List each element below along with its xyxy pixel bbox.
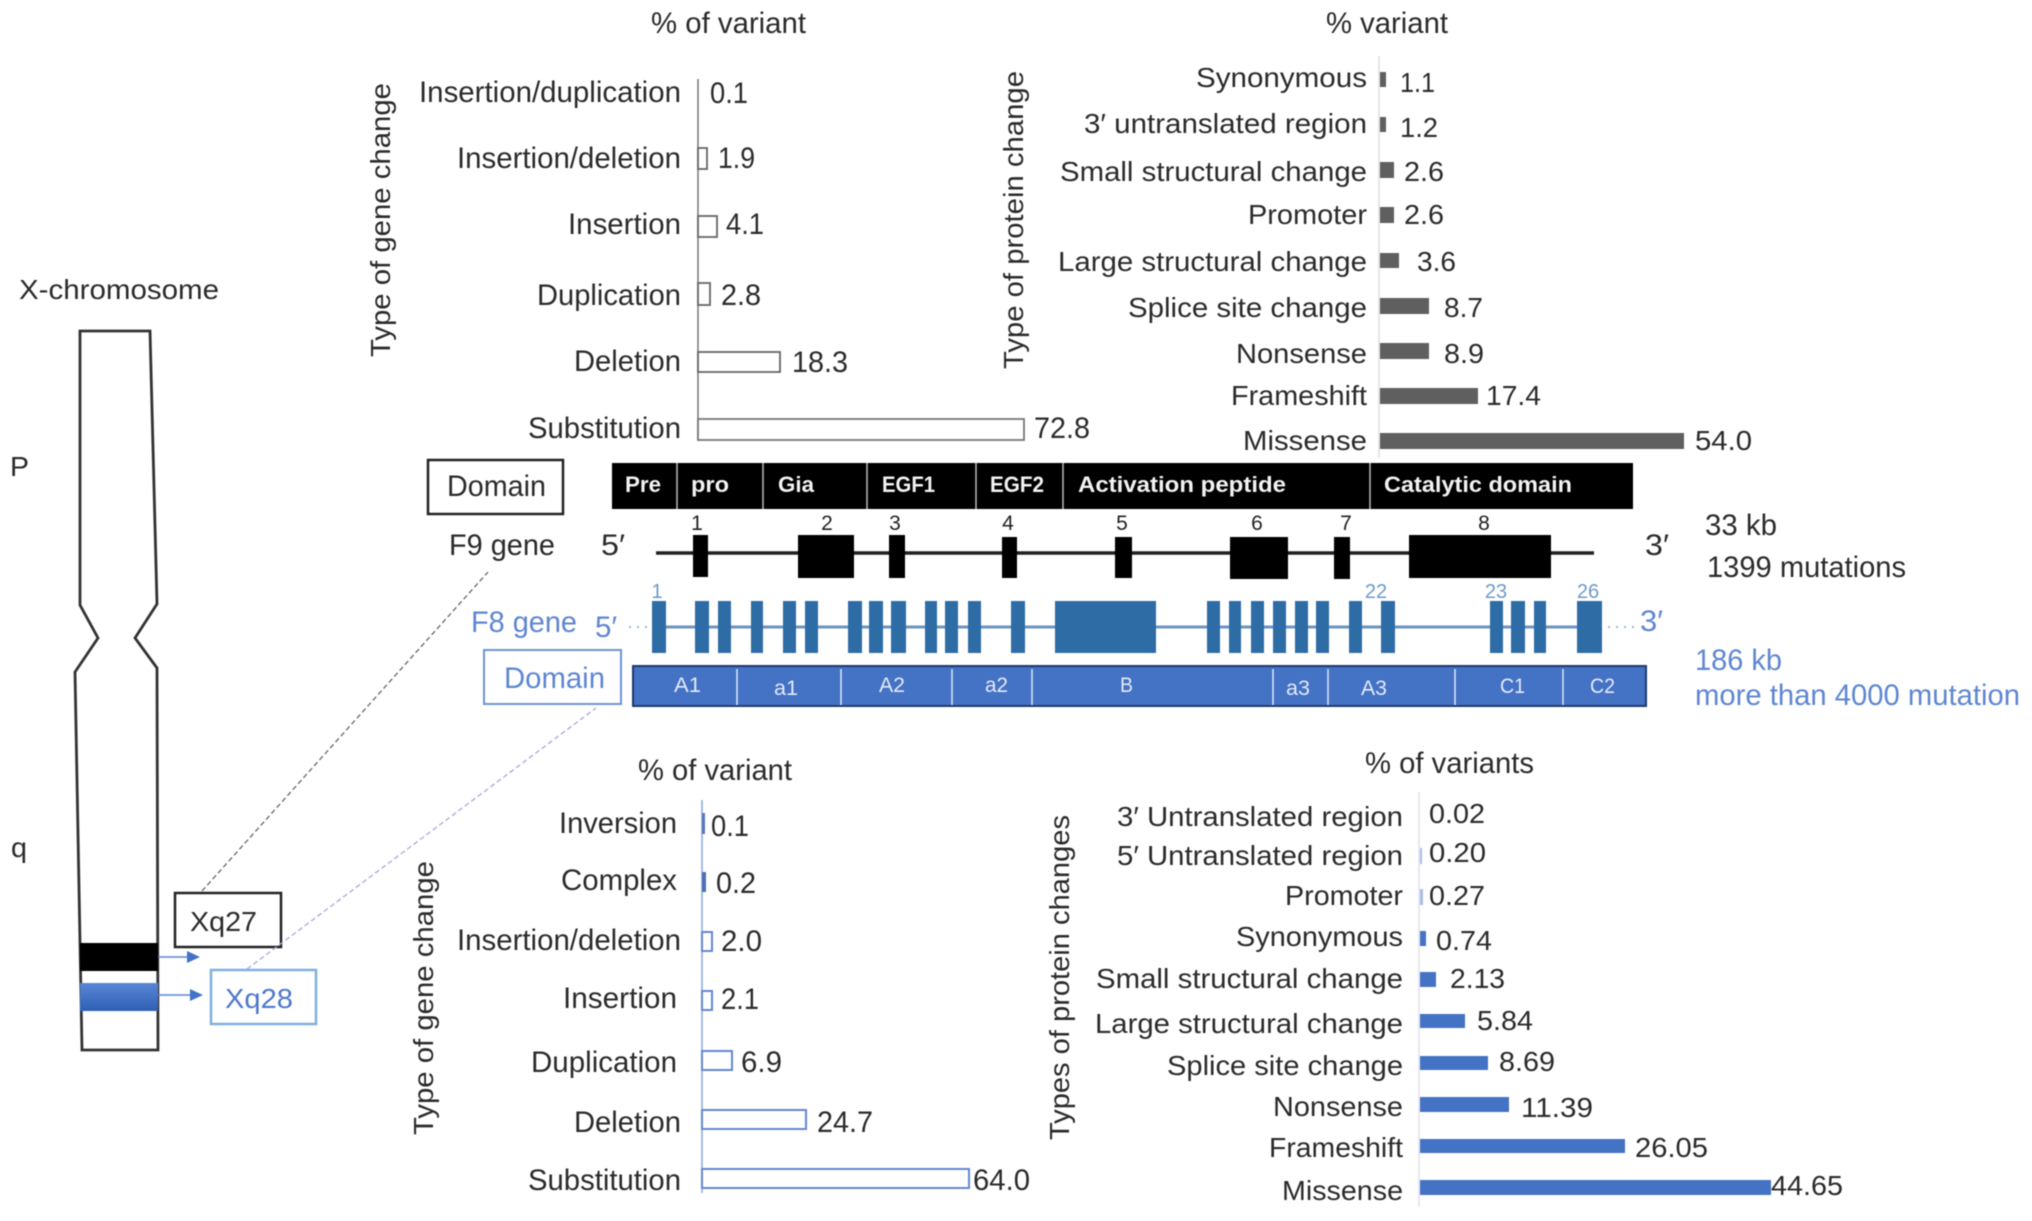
row: Splice site change: Splice site change (1167, 1050, 1403, 1081)
row: Missense (1282, 1170, 1843, 1206)
row: Duplication: Duplication (537, 279, 681, 312)
row: Nonsense: 11.39 (1521, 1092, 1593, 1123)
row: 5' Untranslated region: 0.20 (1429, 837, 1486, 868)
F9 domain bar: Gia (778, 472, 815, 497)
row: Inversion: Inversion (559, 807, 677, 840)
label: 3 prime end: 3′ (1640, 605, 1663, 638)
row: Synonymous: 1.1 (1400, 67, 1435, 98)
axis (1418, 792, 1420, 1207)
row: Synonymous: 0.74 (1436, 925, 1492, 956)
row: Insertion/deletion: 2.0 (721, 925, 762, 958)
F9 gene (449, 512, 1669, 579)
row: Frameshift: 26.05 (1635, 1132, 1708, 1163)
F9 domain bar: pro (691, 472, 729, 497)
row: Insertion/deletion: 1.9 (718, 142, 755, 175)
row: Splice site change (1128, 292, 1483, 323)
band: Xq28 (80, 983, 158, 1011)
row: Large structural change: 5.84 (1477, 1005, 1533, 1036)
row: Promoter: Promoter (1285, 880, 1403, 911)
label: P arm: P (10, 451, 29, 482)
row: Small structural change: 2.6 (1404, 156, 1444, 187)
row: Deletion: Deletion (574, 345, 681, 378)
row: 3' Untranslated region: 0.02 (1429, 798, 1485, 829)
axis (697, 79, 699, 441)
label box: Xq28 (211, 970, 316, 1024)
row: Inversion (559, 807, 749, 843)
row: Nonsense: 8.9 (1444, 338, 1484, 369)
row: Insertion: 2.1 (721, 983, 759, 1016)
row: Frameshift: Frameshift (1269, 1132, 1403, 1163)
row: Substitution: 64.0 (973, 1164, 1030, 1197)
exon numbers: 4 (1002, 512, 1014, 535)
axis title: Type of gene change (408, 861, 439, 1135)
chart: F9 type of gene change (365, 7, 1090, 445)
row: Insertion (568, 208, 764, 241)
label: 5 prime end: 5′ (601, 529, 625, 562)
F8 domain bar: a3 (1286, 677, 1310, 700)
row: Nonsense (1273, 1091, 1593, 1123)
F9 domain bar (612, 463, 1633, 509)
row: Promoter (1248, 199, 1444, 230)
row: 3' untranslated region: 3′ untranslated region (1084, 108, 1367, 139)
row: Inversion: 0.1 (711, 810, 749, 843)
exon numbers: 26 (1577, 581, 1599, 603)
exons (652, 601, 1602, 653)
label box: F9 Domain (428, 460, 563, 514)
connector: Xq27 to F9 gene (202, 572, 488, 891)
chart title: % of variants (1365, 747, 1534, 780)
row: Synonymous: Synonymous (1196, 62, 1367, 93)
label box: F8 Domain: Domain (504, 662, 605, 695)
exons (693, 535, 1551, 579)
F8 size and mutation count (1695, 644, 2020, 712)
axis title: Type of protein change (998, 71, 1029, 369)
label box: Xq27: Xq27 (190, 906, 257, 937)
row: Insertion: Insertion (563, 982, 677, 1015)
label: 5 prime end: 5′ (595, 611, 617, 644)
row: Substitution (528, 1164, 1030, 1197)
F9 domain bar: EGF2 (990, 472, 1044, 497)
exon numbers: 2 (821, 512, 833, 535)
exon numbers (651, 581, 1599, 603)
axis (1378, 56, 1380, 458)
row: Duplication (537, 279, 761, 312)
chart: F8 types of protein changes (1044, 747, 1843, 1207)
row: Small structural change: Small structural change (1096, 963, 1403, 994)
row: Large structural change: Large structural change (1095, 1008, 1403, 1039)
row: 3' Untranslated region (1117, 798, 1485, 832)
row: Large structural change (1095, 1005, 1533, 1039)
exon numbers: 8 (1478, 512, 1490, 535)
F8 domain bar (633, 666, 1646, 706)
row: Missense: 54.0 (1695, 425, 1752, 456)
row: Missense: Missense (1282, 1175, 1403, 1206)
panel: X-chromosome (10, 274, 316, 1050)
row: 3' Untranslated region: 3′ Untranslated region (1117, 801, 1403, 832)
row: Duplication: 6.9 (741, 1046, 782, 1079)
label: F9 gene: F9 gene (449, 529, 555, 562)
row: Deletion: 18.3 (792, 346, 848, 379)
row: Insertion/deletion: Insertion/deletion (457, 142, 681, 175)
row: Nonsense (1236, 338, 1484, 369)
exon numbers: 5 (1116, 512, 1128, 535)
F8 gene (471, 581, 1663, 653)
F9 size and mutation count: 1399 mutations (1707, 551, 1906, 584)
F9 domain bar: Catalytic domain (1384, 472, 1572, 497)
gene line (656, 551, 1594, 555)
row: 5' Untranslated region: 5′ Untranslated region (1117, 840, 1403, 871)
row: Large structural change: 3.6 (1417, 246, 1456, 277)
row: 3' untranslated region: 1.2 (1400, 112, 1438, 143)
row: Duplication: 2.8 (721, 279, 761, 312)
row: Substitution (528, 412, 1090, 445)
label: F8 gene: F8 gene (471, 606, 577, 639)
F9 size and mutation count (1705, 509, 1906, 584)
label: 3 prime end: 3′ (1645, 529, 1669, 562)
label box: F9 Domain: Domain (447, 470, 546, 503)
row: Insertion/deletion: Insertion/deletion (457, 924, 681, 957)
row: Splice site change: 8.69 (1499, 1046, 1555, 1077)
exon numbers: 3 (889, 512, 901, 535)
row: Frameshift (1231, 380, 1541, 411)
chart title: % of variant (651, 7, 807, 40)
row: Splice site change: 8.7 (1444, 292, 1483, 323)
exon numbers: 22 (1365, 581, 1387, 603)
row: Insertion/duplication: Insertion/duplication (419, 76, 681, 109)
row: Synonymous: Synonymous (1236, 921, 1403, 952)
F8 domain bar: B (1120, 674, 1133, 697)
row: Promoter: 2.6 (1404, 199, 1444, 230)
row: Complex: 0.2 (716, 867, 756, 900)
row: Missense: Missense (1243, 425, 1367, 456)
row: Synonymous (1236, 921, 1492, 956)
exon numbers: 1 (651, 581, 663, 603)
exon numbers: 23 (1485, 581, 1507, 603)
axis title: Types of protein changes (1044, 815, 1075, 1140)
arrow: Xq28 band to label (158, 989, 203, 1001)
exon numbers: 1 (691, 512, 703, 535)
label box: Xq28: Xq28 (225, 983, 293, 1014)
row: Duplication: Duplication (531, 1046, 677, 1079)
row: Small structural change: 2.13 (1450, 963, 1505, 994)
row: Frameshift: 17.4 (1486, 380, 1541, 411)
row: Splice site change (1167, 1046, 1555, 1081)
row: Deletion (574, 1106, 873, 1139)
F8 domain bar: a2 (985, 674, 1008, 697)
row: Substitution: Substitution (528, 412, 681, 445)
row: Duplication (531, 1046, 782, 1079)
arrow: Xq27 band to label (158, 951, 200, 963)
F9 domain bar: EGF1 (882, 472, 935, 497)
row: Substitution: 72.8 (1034, 412, 1090, 445)
row: Nonsense: Nonsense (1273, 1091, 1403, 1122)
row: Substitution: Substitution (528, 1164, 681, 1197)
row: Splice site change: Splice site change (1128, 292, 1367, 323)
F8 domain bar: C1 (1500, 675, 1525, 698)
row: Insertion: 4.1 (726, 208, 764, 241)
label box: F8 Domain (484, 650, 621, 704)
F8 domain bar: A2 (879, 674, 905, 697)
F9 domain bar: Pre (625, 472, 661, 497)
row: Promoter: 0.27 (1429, 880, 1485, 911)
axis (701, 800, 703, 1193)
F8 domain bar: A1 (674, 674, 701, 697)
row: Small structural change: Small structural change (1060, 156, 1367, 187)
row: Large structural change: Large structural change (1058, 246, 1367, 277)
row: Insertion: Insertion (568, 208, 681, 241)
row: 5' Untranslated region (1117, 837, 1486, 871)
F8 size and mutation count: 186 kb (1695, 644, 1782, 677)
row: Nonsense: Nonsense (1236, 338, 1367, 369)
F8 domain bar: a1 (774, 677, 798, 700)
F8 domain bar: C2 (1590, 675, 1615, 698)
exon numbers (691, 512, 1490, 535)
row: Insertion (563, 982, 759, 1016)
label box: Xq27 (175, 893, 281, 947)
row: 3' untranslated region (1084, 108, 1438, 143)
F8 size and mutation count: more than 4000 mutation (1695, 679, 2020, 712)
heading: X-chromosome: X-chromosome (19, 274, 219, 305)
chart: F8 type of gene change (408, 754, 1030, 1197)
row: Missense (1243, 425, 1752, 456)
connector: Xq28 to F8 domain (247, 708, 596, 969)
F9 domain bar: Activation peptide (1078, 472, 1286, 497)
row: Synonymous (1196, 62, 1435, 98)
chart: F9 type of protein change (998, 7, 1752, 458)
row: Frameshift: Frameshift (1231, 380, 1367, 411)
exon numbers: 7 (1340, 512, 1352, 535)
row: Insertion/duplication: 0.1 (710, 77, 748, 110)
exon numbers: 6 (1251, 512, 1263, 535)
band: Xq27 (80, 943, 158, 971)
F8 domain bar: A3 (1361, 677, 1387, 700)
label: q arm: q (11, 832, 27, 863)
F9 size and mutation count: 33 kb (1705, 509, 1777, 542)
chart title: % of variant (638, 754, 793, 787)
row: Promoter: Promoter (1248, 199, 1367, 230)
gene line (629, 626, 1635, 628)
row: Deletion: Deletion (574, 1106, 681, 1139)
axis title: Type of gene change (365, 83, 396, 357)
chromosome outline (75, 331, 158, 1050)
row: Promoter (1285, 880, 1485, 911)
row: Frameshift (1269, 1132, 1708, 1163)
row: Complex (561, 864, 756, 900)
row: Missense: 44.65 (1771, 1170, 1843, 1201)
chart title: % variant (1326, 7, 1449, 40)
row: Deletion: 24.7 (817, 1106, 873, 1139)
row: Complex: Complex (561, 864, 677, 897)
row: Deletion (574, 345, 848, 379)
